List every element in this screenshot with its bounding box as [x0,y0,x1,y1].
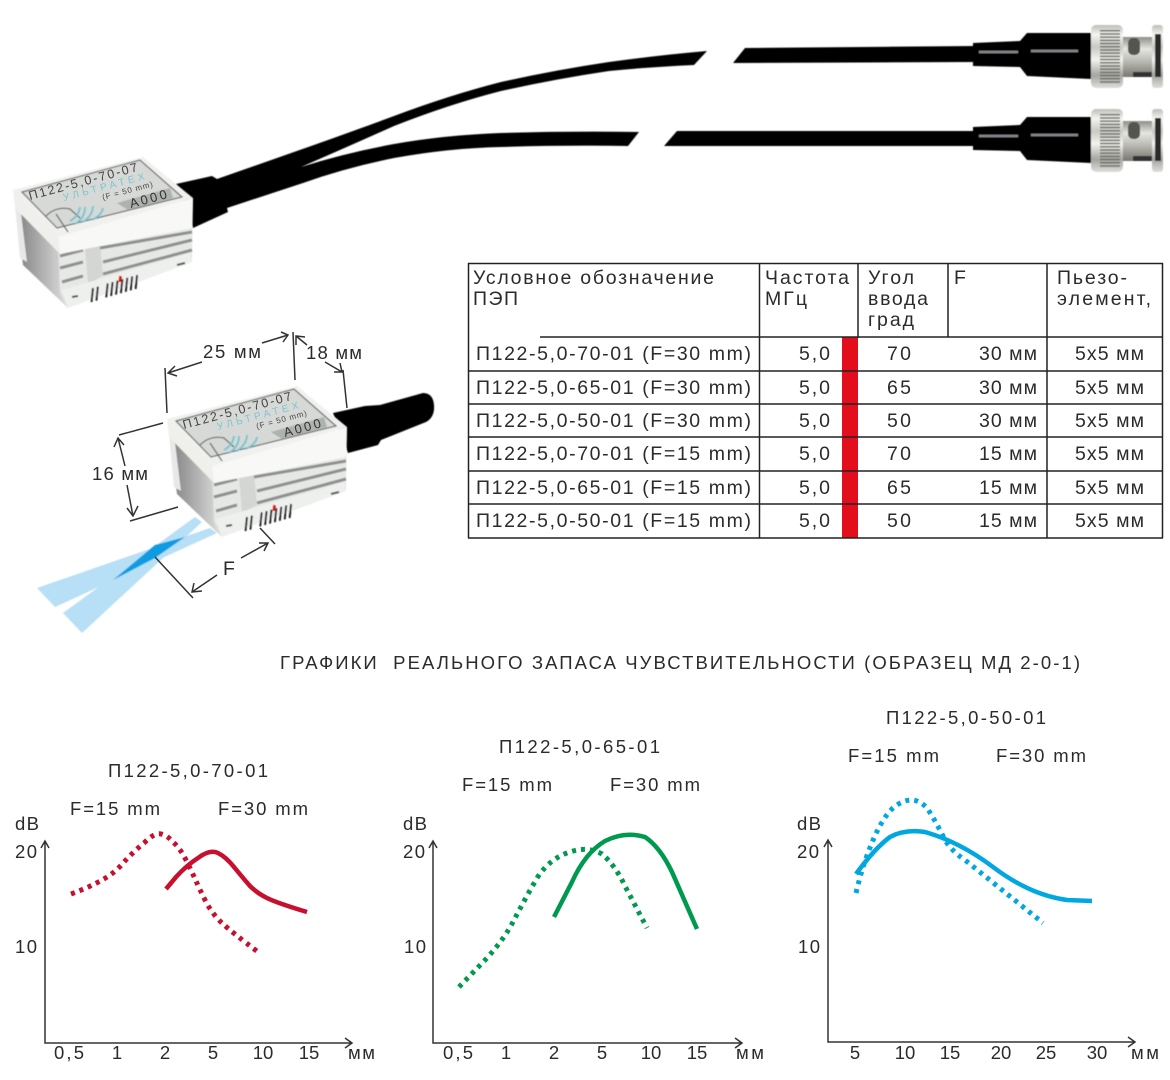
table row 3: 5,0 [799,410,830,432]
x axis labels: 0,5 [54,1042,84,1063]
probe labelling: upper transducer: УЛЬТРАТЕХ [62,171,146,204]
table row 5: 15 мм [979,477,1037,499]
table row 6: 5,0 [799,510,830,532]
dimension: width 25 mm: 25 мм [203,341,261,362]
table header: Угол [868,267,914,289]
table header: МГц [765,288,807,310]
connector: upper BNC plug [973,25,1163,88]
probe labelling: lower transducer: УЛЬТРАТЕХ [216,400,300,433]
axes [429,841,742,1048]
table header: Условное обозначение [473,267,714,289]
curve: F=30 mm solid [166,852,307,912]
table row 5: 5,0 [799,477,830,499]
curve: F=15 mm dotted [459,849,647,987]
x axis labels: 15 [687,1042,707,1063]
x axis labels [443,1042,764,1063]
table row 4: 15 мм [979,443,1037,465]
chart: П122-5,0-70-01: F=30 mm [218,798,308,819]
probe labelling: lower transducer: А000 [282,416,322,440]
table row 2 [476,377,1144,399]
table row 1: 5,0 [799,343,830,365]
x axis labels: 2 [549,1042,559,1063]
chart: П122-5,0-70-01: dB [15,813,39,834]
probe labelling: lower transducer: П122-5,0-70-07 [181,389,293,432]
chart: П122-5,0-50-01 [797,707,1159,1063]
table row 3: 50 [887,410,911,432]
table row 1: 70 [887,343,911,365]
chart: П122-5,0-50-01: F=15 mm [848,745,939,766]
table row 5: 5х5 мм [1075,477,1144,499]
x axis labels: мм [736,1042,764,1063]
probe photo: lower transducer housing [167,386,347,537]
x axis labels: 5 [208,1042,218,1063]
x axis labels: мм [348,1042,375,1063]
table row 1: 5х5 мм [1075,343,1144,365]
table row 4 [476,443,1144,465]
x axis labels: 10 [641,1042,661,1063]
chart: П122-5,0-65-01: 10 [404,936,426,957]
table row 6: 50 [887,510,911,532]
heading: sensitivity charts: ГРАФИКИ РЕАЛЬНОГО ЗАПАСА ЧУВСТВИТЕЛЬНОСТИ (ОБРАЗЕЦ МД 2-0-1) [280,652,1080,673]
dimension: width 25 mm [165,332,295,413]
table row 2: 5х5 мм [1075,377,1144,399]
x axis labels: 15 [940,1042,960,1063]
table row 3: П122-5,0-50-01 (F=30 mm) [476,410,751,432]
chart: П122-5,0-50-01: П122-5,0-50-01 [886,707,1046,728]
x axis labels: 20 [991,1042,1011,1063]
red frequency bar [842,337,858,538]
table row 5 [476,477,1144,499]
probe labelling: lower transducer [181,389,322,440]
x axis labels: 5 [850,1042,860,1063]
table header: элемент, [1057,288,1151,310]
table row 1 [476,343,1144,365]
chart: П122-5,0-65-01: П122-5,0-65-01 [499,736,660,757]
chart: П122-5,0-50-01: dB [797,813,821,834]
probe labelling: upper transducer: (F = 50 mm) [101,180,154,202]
table header: Частота [765,267,849,289]
dimension: focal distance F: F [223,558,235,580]
beam: crossing ultrasound beams with focal zone [37,517,217,633]
x axis labels: 10 [895,1042,915,1063]
chart: П122-5,0-65-01 [403,736,764,1063]
axes [41,841,352,1048]
chart: П122-5,0-70-01: 20 [15,841,37,862]
table: probe specifications [468,263,1163,538]
curve: F=15 mm dotted [856,800,1043,923]
table row 4: 70 [887,443,911,465]
chart: П122-5,0-65-01: F=30 mm [610,774,700,795]
table row 4: 5,0 [799,443,830,465]
table row 3 [476,410,1144,432]
x axis labels: 5 [597,1042,607,1063]
table row 4: П122-5,0-70-01 (F=15 mm) [476,443,751,465]
table row 5: П122-5,0-65-01 (F=15 mm) [476,477,751,499]
probe labelling: lower transducer: (F = 50 mm) [255,409,308,431]
dimension: depth 18 mm [296,336,362,408]
curve: F=15 mm dotted [71,834,258,952]
table header: F [954,267,966,289]
table row 6: 15 мм [979,510,1037,532]
table row 2: П122-5,0-65-01 (F=30 mm) [476,377,751,399]
table row 2: 30 мм [979,377,1037,399]
x axis labels: 0,5 [443,1042,473,1063]
x axis labels [850,1042,1159,1063]
curve: F=30 mm solid [554,835,697,929]
x axis labels: 10 [253,1042,273,1063]
chart: П122-5,0-65-01: dB [403,813,427,834]
table header: Пьезо- [1057,267,1127,289]
probe photo: upper transducer housing [13,157,193,308]
table row 6 [476,510,1144,532]
table row 6: П122-5,0-50-01 (F=15 mm) [476,510,751,532]
x axis labels: 25 [1036,1042,1056,1063]
probe labelling: upper transducer [27,160,168,211]
chart: П122-5,0-65-01: F=15 mm [462,774,552,795]
chart: П122-5,0-65-01: 20 [403,841,425,862]
x axis labels: 1 [112,1042,122,1063]
table header: ввода [868,288,928,310]
cables: upper and lower leads running from the first probe [176,46,975,228]
table header: ПЭП [473,288,518,310]
x axis labels: мм [1131,1042,1159,1063]
table header: град [868,309,915,331]
x axis labels [54,1042,375,1063]
table row 3: 30 мм [979,410,1037,432]
table row 4: 5х5 мм [1075,443,1144,465]
chart: П122-5,0-50-01: F=30 mm [996,745,1086,766]
chart: П122-5,0-50-01: 10 [798,936,820,957]
table row 1: П122-5,0-70-01 (F=30 mm) [476,343,751,365]
table row 1: 30 мм [979,343,1037,365]
table header [473,267,1151,331]
x axis labels: 2 [160,1042,170,1063]
dimension: depth 18 mm: 18 мм [306,342,362,363]
dimension: height 16 mm [92,423,178,521]
probe labelling: upper transducer: А000 [128,187,168,211]
table row 2: 65 [887,377,911,399]
chart: П122-5,0-70-01 [15,760,375,1063]
connector: lower BNC plug [973,109,1163,172]
x axis labels: 1 [501,1042,511,1063]
curve: F=30 mm solid [856,831,1092,901]
x axis labels: 15 [299,1042,319,1063]
dimension: height 16 mm: 16 мм [92,463,148,484]
table row 6: 5х5 мм [1075,510,1144,532]
axes [824,840,1135,1047]
table row 2: 5,0 [799,377,830,399]
table row 3: 5х5 мм [1075,410,1144,432]
x axis labels: 30 [1087,1042,1107,1063]
dimension: focal distance F [155,528,275,598]
chart: П122-5,0-70-01: F=15 mm [70,798,160,819]
table row 5: 65 [887,477,911,499]
cable stub: second transducer [333,393,434,453]
chart: П122-5,0-70-01: П122-5,0-70-01 [108,760,268,781]
chart: П122-5,0-70-01: 10 [15,936,37,957]
probe labelling: upper transducer: П122-5,0-70-07 [27,160,139,203]
chart: П122-5,0-50-01: 20 [797,841,819,862]
